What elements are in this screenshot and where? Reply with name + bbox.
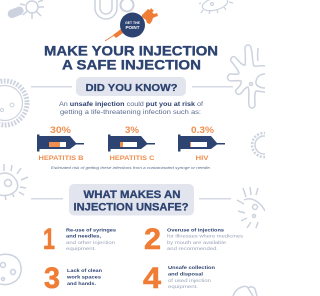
- item 3: [44, 262, 102, 295]
- icon: bacteria top right: [199, 0, 233, 14]
- item 2: Overuse of injections: [167, 228, 224, 234]
- item 4: 4: [143, 262, 161, 295]
- logo: get the point: [105, 8, 158, 41]
- heading: what makes an injection unsafe: WHAT MAKES AN: [84, 189, 181, 201]
- item 2: [144, 223, 244, 256]
- item 3: 3: [44, 262, 60, 295]
- text: intro: getting a life-threatening infection such as:: [60, 109, 201, 116]
- item 2: and recommended.: [167, 246, 218, 252]
- stat: hepatitis b: [37, 125, 84, 162]
- item 1: equipment.: [66, 246, 96, 252]
- title: A SAFE INJECTION: [62, 56, 201, 72]
- stat: hiv: [178, 125, 225, 162]
- stat: hiv: HIV: [196, 155, 209, 162]
- stat: hepatitis c: [108, 125, 155, 162]
- item 1: Re-use of syringes: [66, 228, 116, 234]
- heading: did you know: [31, 77, 233, 96]
- item 4: of used injection: [168, 278, 211, 284]
- item 2: 2: [144, 223, 161, 256]
- icon: microbe bottom left: [0, 254, 21, 285]
- text: footnote: Estimated risk of getting these infections from a contaminated syringe or needle.: [51, 166, 211, 170]
- icon: virus right middle: [252, 133, 276, 157]
- item 1: [43, 223, 116, 256]
- icon: virus top left: [7, 0, 44, 19]
- logo: get the point: POINT: [125, 25, 140, 30]
- icon: bacteria lower right: [237, 187, 265, 228]
- stat: hepatitis b: HEPATITIS B: [38, 155, 84, 162]
- item 3: Lack of clean: [67, 268, 102, 274]
- heading: what makes an injection unsafe: INJECTION UNSAFE?: [74, 202, 189, 214]
- item 4: [143, 262, 215, 295]
- logo: get the point: GET THE: [125, 21, 141, 25]
- item 1: and other injection: [66, 240, 115, 246]
- stat: hepatitis c: HEPATITIS C: [110, 155, 155, 162]
- item 2: for illnesses where medicines: [167, 234, 244, 240]
- text: intro: [59, 101, 203, 116]
- item 4: equipment.: [168, 284, 198, 290]
- title: MAKE YOUR INJECTION: [44, 42, 218, 58]
- stat: hepatitis b: 30%: [50, 125, 71, 135]
- item 4: Unsafe collection: [168, 265, 215, 271]
- item 2: by mouth are available: [167, 240, 226, 246]
- stat: hepatitis c: 3%: [125, 125, 139, 135]
- item 3: and hands.: [67, 281, 97, 287]
- item 3: work spaces: [66, 274, 101, 280]
- heading: what makes an injection unsafe: [31, 184, 231, 216]
- stat: hiv: 0.3%: [191, 125, 214, 135]
- icon: tube top centre: [95, 0, 134, 19]
- title: [44, 42, 218, 72]
- icon: virus right: [228, 45, 265, 108]
- item 1: and needles,: [66, 234, 102, 240]
- item 1: 1: [43, 223, 55, 256]
- text: intro: An unsafe injection could put you at risk of: [59, 101, 203, 108]
- icon: virus lower left: [0, 164, 28, 200]
- icon: microbe bottom right: [233, 286, 257, 296]
- heading: did you know: DID YOU KNOW?: [86, 82, 178, 94]
- item 4: and disposal: [168, 272, 204, 278]
- icon: virus left: [0, 81, 27, 125]
